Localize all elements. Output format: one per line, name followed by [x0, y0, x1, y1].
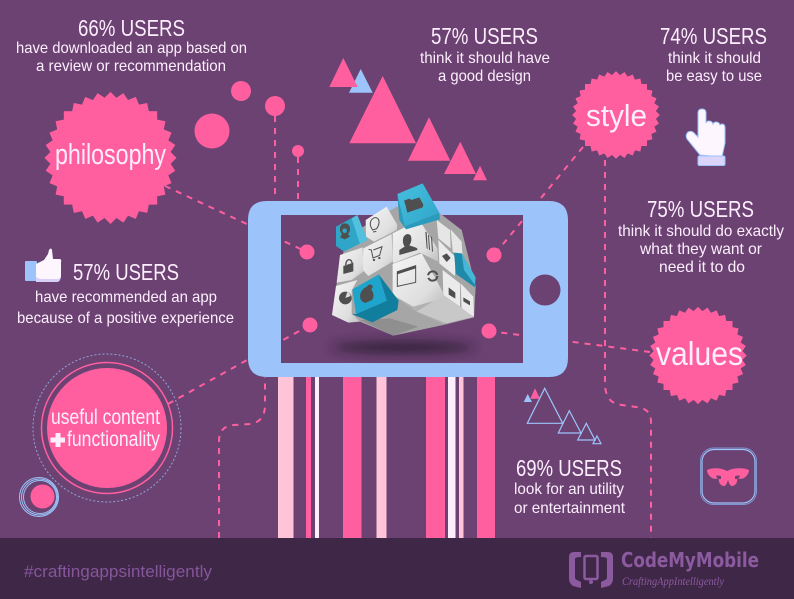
stat: 75% do what they want: need it to do	[659, 259, 745, 276]
badge: style: style	[586, 98, 647, 133]
stat: 69% utility: 69% USERS	[516, 455, 622, 481]
cube illustration	[332, 183, 476, 353]
stat: 57% good design	[420, 23, 550, 85]
stat: 75% do what they want	[618, 196, 784, 276]
stat: 57% good design: think it should have	[420, 50, 550, 67]
screen anchor dots	[300, 244, 502, 338]
stat: 75% do what they want: 75% USERS	[647, 196, 754, 222]
tile: pie	[332, 280, 360, 323]
tile: lock	[337, 247, 363, 283]
stat: 66% users: 66% USERS	[78, 15, 185, 41]
cube icons	[339, 197, 470, 305]
dashed connector lines	[165, 116, 651, 538]
small ringed circle	[20, 478, 58, 516]
right tiles	[437, 220, 451, 248]
footer bar	[0, 538, 794, 599]
stat: 57% recommended: because of a positive experience	[17, 310, 234, 327]
stat: 57% recommended: 57% USERS	[73, 259, 179, 285]
badge: style	[572, 71, 660, 159]
icon: thumbs up	[25, 248, 61, 282]
stat: 57% good design: 57% USERS	[431, 23, 538, 49]
stat: 69% utility: look for an utility	[514, 481, 624, 498]
stat: 69% utility: or entertainment	[514, 500, 626, 517]
icon: butterfly in rounded square	[700, 448, 756, 504]
logo: CodeMyMobile	[569, 548, 759, 588]
outlined triangles	[524, 388, 601, 444]
tile: blue left	[336, 215, 367, 252]
stat: 74% easy to use: be easy to use	[666, 68, 762, 85]
stripes under device	[278, 377, 495, 538]
stat: 57% good design: a good design	[438, 68, 531, 85]
stat: 74% easy to use: think it should	[668, 50, 761, 67]
tile: cart	[363, 234, 393, 276]
tile: window	[393, 253, 443, 307]
stat: 57% recommended	[17, 259, 234, 327]
stat: 75% do what they want: what they want or	[639, 241, 763, 258]
decorative circles	[194, 81, 304, 157]
stat: 66% users	[16, 15, 247, 75]
badge: philosophy: philosophy	[55, 139, 166, 171]
logo: CodeMyMobile: CraftingAppIntelligently	[622, 574, 725, 588]
pink triangles	[329, 58, 487, 180]
badge: philosophy	[44, 92, 177, 224]
tile: bulb	[366, 207, 397, 242]
badge: values: values	[656, 335, 743, 372]
stat: 74% easy to use	[660, 23, 767, 85]
badge: useful content + functionality: useful content	[51, 406, 160, 429]
badge: values	[649, 307, 747, 404]
device frame	[248, 201, 568, 377]
icon: pointing hand	[686, 109, 725, 166]
stat: 74% easy to use: 74% USERS	[660, 23, 767, 49]
badge: useful content + functionality	[33, 354, 181, 502]
tile: blue right	[454, 253, 475, 287]
stat: 75% do what they want: think it should do exactly	[618, 223, 784, 240]
stat: 69% utility	[514, 455, 626, 517]
logo: CodeMyMobile: CodeMyMobile	[621, 548, 759, 572]
tile: person	[393, 220, 438, 263]
tile: money	[352, 274, 399, 322]
hashtag: #craftingappsintelligently	[24, 563, 213, 581]
badge: useful content + functionality: functionality	[67, 428, 160, 451]
stat: 57% recommended: have recommended an app	[35, 289, 217, 306]
tile: folder	[397, 194, 440, 229]
stat: 66% users: have downloaded an app based on	[16, 40, 247, 57]
stat: 66% users: a review or recommendation	[36, 58, 226, 75]
